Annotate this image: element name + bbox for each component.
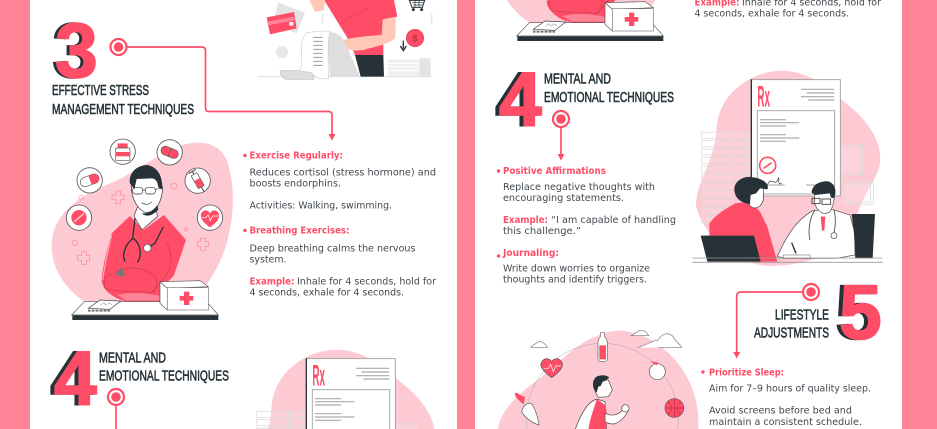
text block: prioritize sleep: [701, 368, 871, 428]
heading: section 5: [754, 306, 829, 342]
text block: journaling: [497, 248, 650, 286]
text block: exercise regularly: Exercise Regularly:: [250, 150, 343, 162]
heading: section 3: EFFECTIVE STRESS: [52, 82, 149, 99]
text block: positive affirmations: [497, 166, 676, 237]
heading: section 5: LIFESTYLE: [775, 306, 829, 323]
heading: section 4, right: MENTAL AND: [544, 70, 611, 88]
text block: breathing example, right top: [694, 0, 881, 19]
connector: section 4 target, left: [108, 389, 124, 429]
text block: prioritize sleep: Aim for 7–9 hours of quality sleep.: [709, 384, 871, 395]
text block: prioritize sleep: Avoid screens before bed and: [709, 406, 852, 417]
illustration: doctor, right panel top: [506, 0, 664, 41]
heading: section 4, left: MENTAL AND: [99, 349, 166, 366]
illustration: shopper with receipt: $: [412, 33, 418, 43]
illustration: shopper with receipt: [258, 0, 432, 80]
text block: prioritize sleep: Prioritize Sleep:: [709, 368, 784, 379]
heading: section 4, left: EMOTIONAL TECHNIQUES: [99, 368, 229, 385]
text block: journaling: Write down worries to organize: [503, 264, 650, 275]
connector: section 3 target and arrow: [110, 39, 336, 140]
text block: exercise regularly: [243, 150, 436, 212]
text block: breathing exercises: Inhale for 4 seconds, hold for: [297, 276, 436, 287]
number 4, right: 4: [499, 57, 542, 143]
text block: breathing exercises: system.: [250, 254, 286, 265]
text block: positive affirmations: “I am capable of handling: [551, 215, 676, 226]
number 4, right: 4: [495, 57, 538, 143]
illustration: doctor with arms crossed: [52, 139, 233, 320]
heading: section 4, left: [99, 349, 229, 385]
illustration: prescription consultation, left: Rx: [312, 359, 325, 392]
number 3: 3: [55, 8, 98, 94]
illustration: runner with healthy lifestyle icons: [498, 330, 698, 429]
number 5: 5: [835, 270, 878, 356]
number 4, left: 4: [50, 336, 93, 422]
text block: breathing exercises: Breathing Exercises:: [250, 226, 350, 237]
number 5: 5: [839, 270, 882, 356]
text block: breathing exercises: Deep breathing calms the nervous: [250, 243, 416, 254]
text block: prioritize sleep: maintain a consistent schedule.: [709, 417, 862, 428]
heading: section 3: [52, 82, 194, 118]
text block: breathing example, right top: 4 seconds, exhale for 4 seconds.: [694, 8, 849, 19]
number 3: 3: [52, 8, 95, 94]
text block: exercise regularly: boosts endorphins.: [250, 178, 341, 190]
text block: exercise regularly: Reduces cortisol (stress hormone) and: [250, 168, 436, 178]
text block: breathing exercises: 4 seconds, exhale for 4 seconds.: [250, 287, 404, 298]
connector: section 5 target and arrow: [733, 284, 819, 358]
text block: journaling: Journaling:: [502, 248, 559, 259]
text block: breathing exercises: Example:: [250, 276, 294, 287]
text block: positive affirmations: Replace negative thoughts with: [503, 182, 655, 193]
heading: section 4, right: EMOTIONAL TECHNIQUES: [544, 89, 674, 106]
right white panel: [475, 0, 902, 429]
number 4, left: 4: [54, 336, 97, 422]
heading: section 4, right: [544, 70, 674, 106]
left white panel: [30, 0, 457, 429]
text block: positive affirmations: Positive Affirmations: [503, 166, 606, 177]
text block: breathing exercises: [243, 226, 436, 298]
connector: section 4 target and arrow, right: [553, 111, 569, 160]
text block: exercise regularly: Activities: Walking, swimming.: [250, 201, 392, 212]
text block: positive affirmations: Example:: [503, 215, 548, 226]
text block: journaling: thoughts and identify triggers.: [503, 274, 647, 286]
text block: positive affirmations: this challenge.”: [503, 226, 581, 237]
illustration: prescription consultation, right: [692, 71, 883, 266]
illustration: prescription consultation, left: [256, 350, 434, 429]
text block: positive affirmations: encouraging statements.: [503, 193, 624, 204]
heading: section 3: MANAGEMENT TECHNIQUES: [52, 101, 194, 118]
heading: section 5: ADJUSTMENTS: [754, 325, 829, 342]
illustration: prescription consultation, right: Rx: [757, 80, 770, 113]
